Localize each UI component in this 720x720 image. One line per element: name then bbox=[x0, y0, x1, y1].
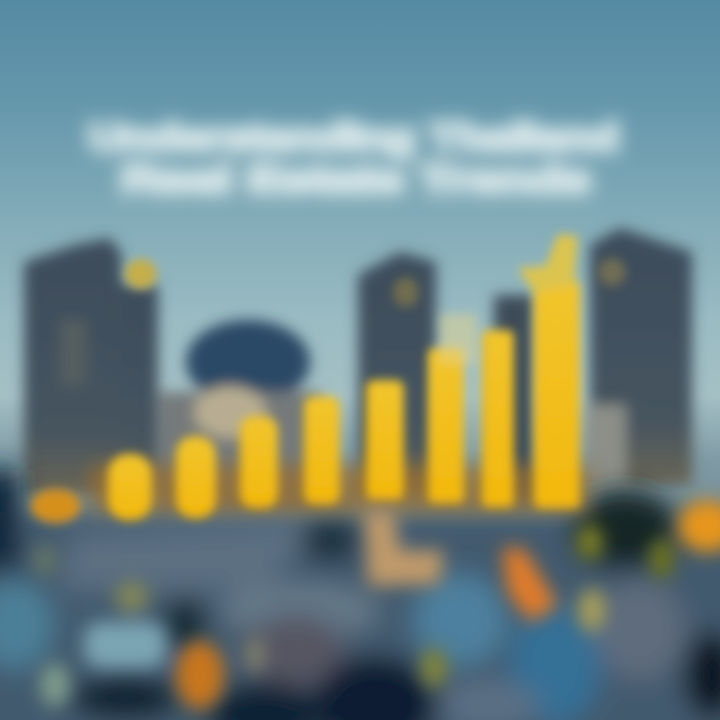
small glow left tower bbox=[125, 259, 157, 289]
bar 0 bbox=[31, 489, 81, 523]
small glow right tower bbox=[598, 258, 626, 286]
orange light bottom left bbox=[176, 641, 224, 709]
olive lights bbox=[577, 524, 603, 560]
centre tower bbox=[358, 252, 436, 495]
pale car bbox=[84, 622, 166, 668]
cars and lights bbox=[32, 500, 720, 709]
bar 6 bbox=[428, 348, 464, 503]
chart tip bbox=[518, 234, 578, 292]
title bbox=[89, 117, 619, 201]
orange streak bbox=[502, 548, 558, 622]
tan figure bbox=[364, 510, 444, 586]
ground and street bbox=[0, 470, 720, 720]
street blobs bbox=[0, 470, 720, 720]
left tower bbox=[24, 238, 158, 495]
bar 2 bbox=[176, 436, 216, 518]
title: Real Estate Trends bbox=[121, 159, 591, 201]
bar 1 bbox=[108, 454, 152, 520]
skyline buildings bbox=[24, 228, 692, 507]
title: Understanding Thailand bbox=[89, 117, 619, 159]
bar 5 bbox=[366, 380, 404, 500]
ground base bbox=[0, 512, 720, 720]
pale bar glow bbox=[440, 314, 476, 364]
centre dome bbox=[160, 320, 320, 507]
bar 4 bbox=[304, 396, 340, 504]
right tower bbox=[586, 228, 692, 490]
street-level light bbox=[31, 489, 81, 523]
warm glow behind bars bbox=[90, 465, 590, 513]
right orange glow bbox=[678, 500, 720, 552]
small glow centre tower bbox=[393, 277, 419, 307]
bar 7 bbox=[482, 330, 514, 507]
thin tower behind bars bbox=[494, 295, 534, 500]
bar 3 bbox=[240, 416, 278, 508]
bar 8 bbox=[534, 280, 580, 508]
yellow bars rising left to right bbox=[108, 234, 626, 520]
